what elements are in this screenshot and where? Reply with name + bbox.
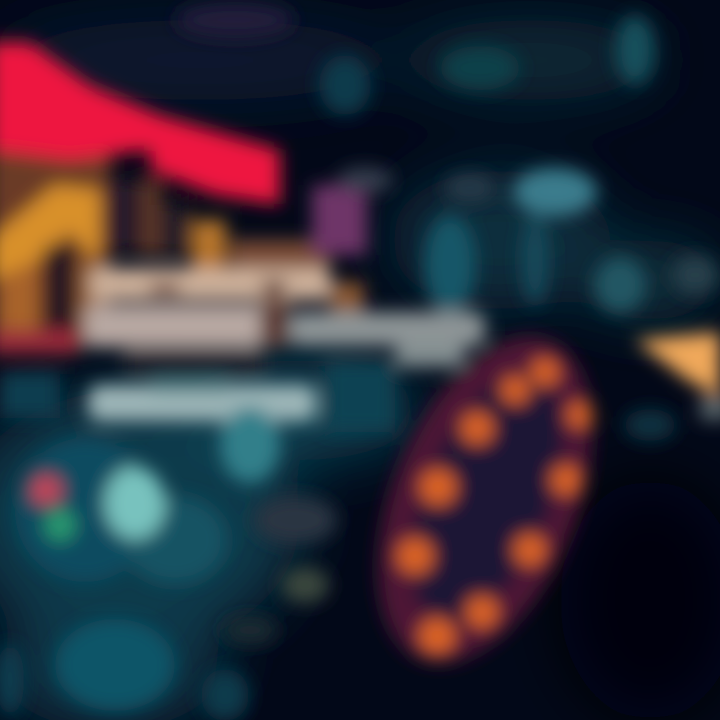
roulette wheel	[335, 306, 635, 694]
icon: red and green indicator	[31, 476, 75, 541]
lower left teal shapes	[0, 362, 395, 720]
heading: blurred title block	[85, 268, 485, 421]
panel: orange building	[0, 150, 364, 354]
panel: red neon sign	[0, 42, 280, 205]
right orange glow	[635, 332, 720, 420]
purple block	[312, 167, 393, 255]
upper teal haze	[175, 2, 655, 115]
icon: light oval	[105, 467, 165, 539]
teal center and right shapes	[424, 168, 719, 441]
